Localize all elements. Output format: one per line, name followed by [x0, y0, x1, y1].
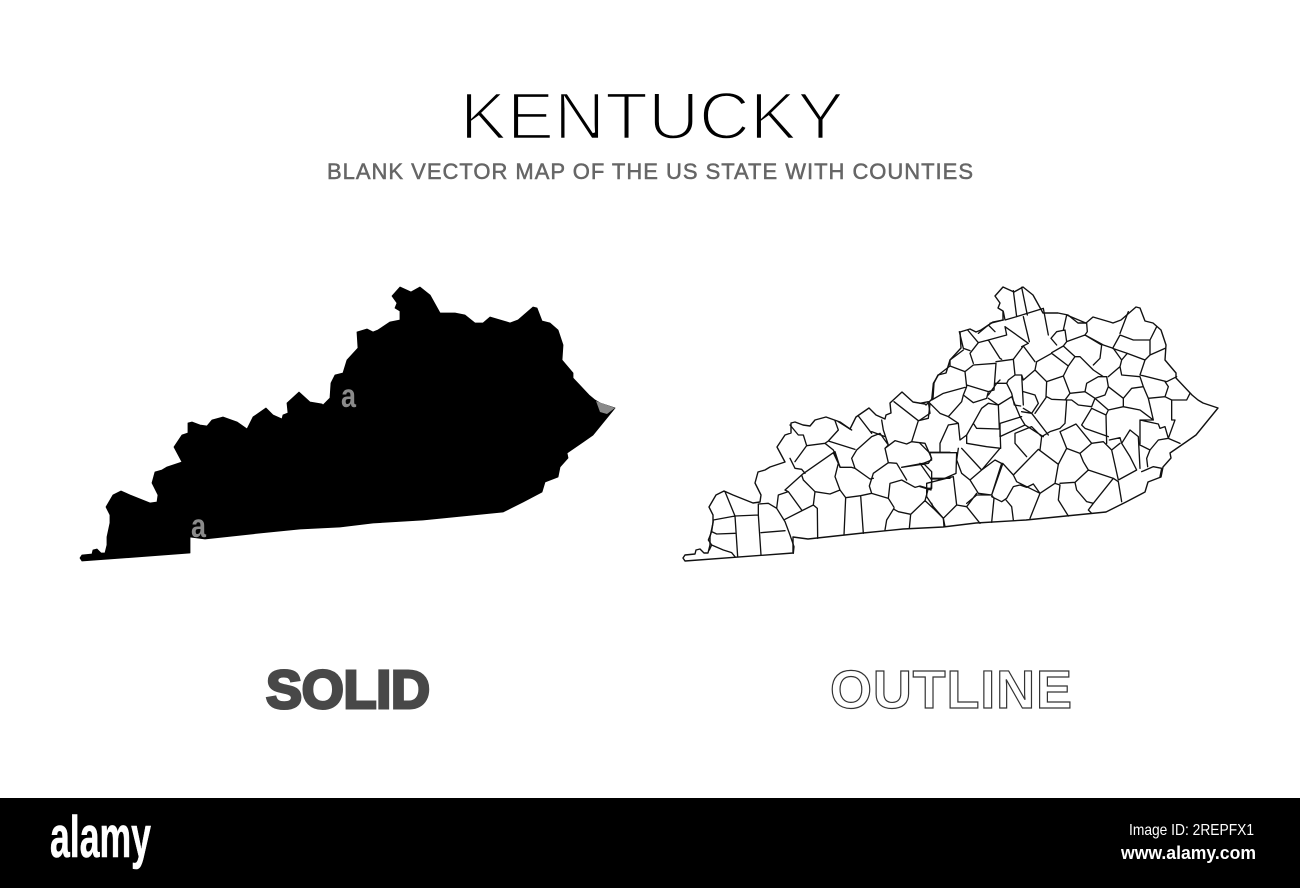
solid map of Kentucky: [80, 287, 615, 561]
watermark letter on map, centre: a: [341, 377, 357, 414]
label: outline: OUTLINE: [830, 660, 1072, 720]
watermark fragment at east tip: [596, 401, 615, 414]
eastern counties: [920, 287, 1190, 527]
state border: [683, 287, 1218, 561]
outline map with counties: [683, 287, 1218, 561]
watermark letter on map, south west: a: [191, 507, 207, 544]
footer logo: alamy: [50, 805, 151, 870]
website: www.alamy.com: [1120, 843, 1256, 863]
image id: Image ID: 2REPFX1: [1129, 822, 1254, 839]
title: KENTUCKY: [460, 79, 844, 154]
footer bar: [0, 798, 1300, 888]
subtitle: BLANK VECTOR MAP OF THE US STATE WITH COUNTIES: [327, 159, 973, 184]
western counties: [708, 402, 950, 557]
label: solid: SOLID: [266, 660, 430, 720]
